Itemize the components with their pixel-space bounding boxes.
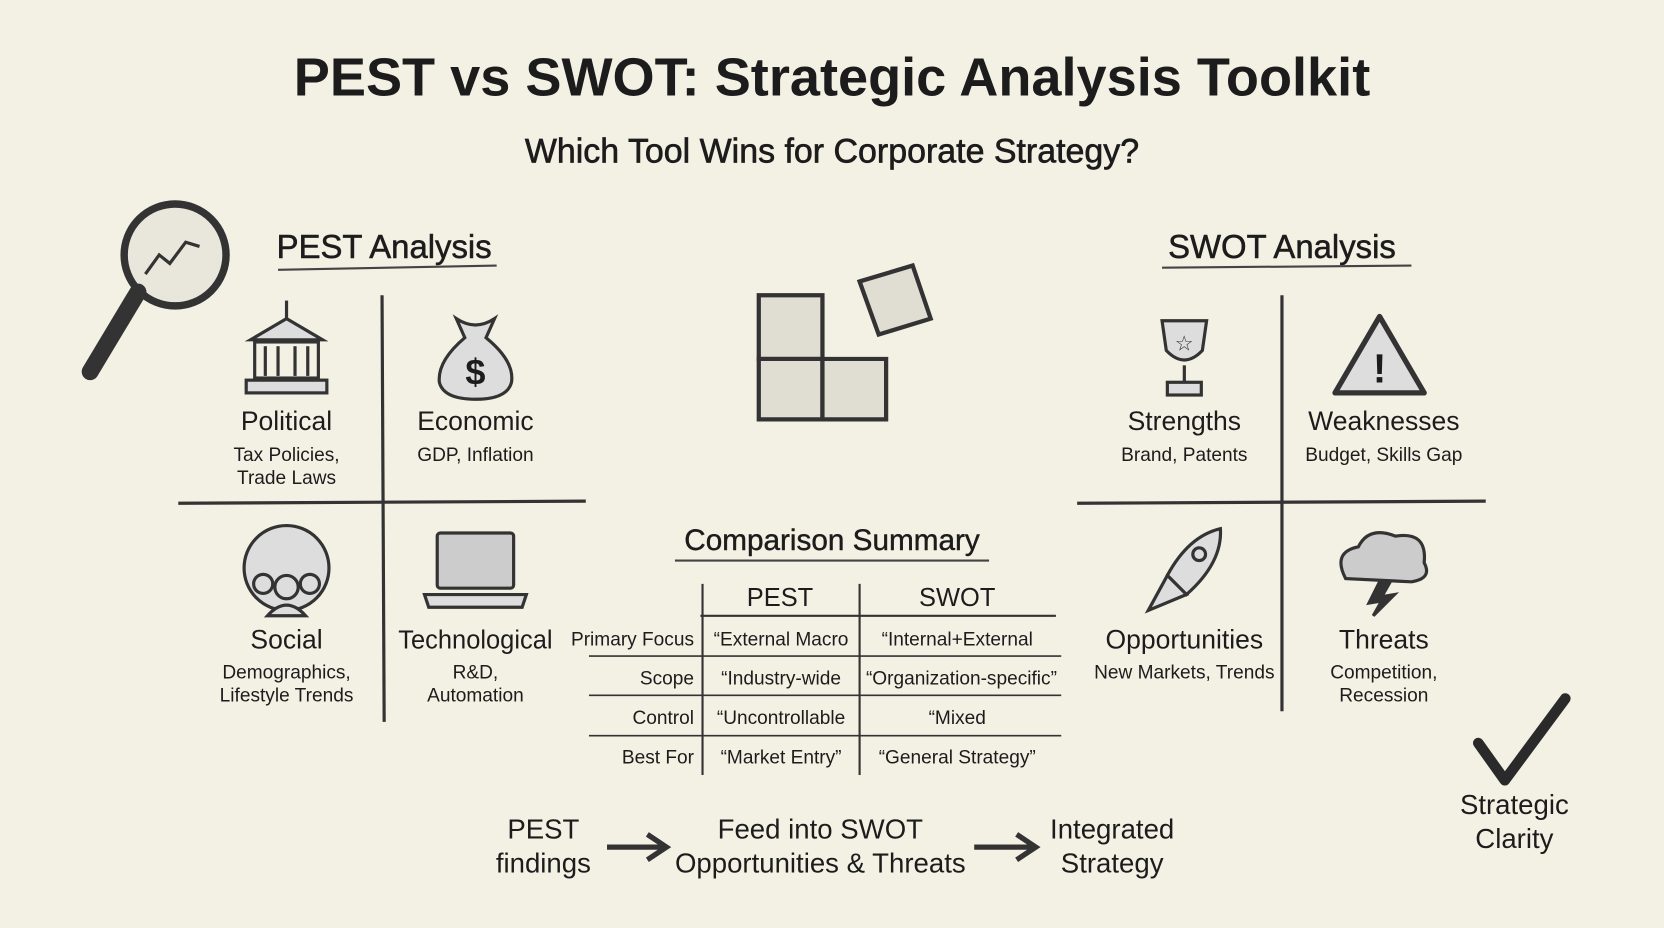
panel: SWOT grid: Brand, Patents bbox=[1121, 445, 1247, 466]
panel: PEST grid bbox=[178, 295, 586, 722]
panel: PEST grid: Demographics, bbox=[222, 662, 351, 683]
panel: PEST grid: Automation bbox=[427, 686, 524, 707]
panel: SWOT grid: Recession bbox=[1339, 686, 1428, 707]
flow: PEST findings: findings bbox=[496, 848, 591, 879]
panel: SWOT grid: New Markets, Trends bbox=[1094, 662, 1275, 683]
heading: SWOT Analysis: SWOT Analysis bbox=[1168, 228, 1396, 265]
panel: PEST grid: Tax Policies, bbox=[233, 445, 340, 466]
table: comparison: “Uncontrollable bbox=[717, 708, 845, 729]
table: comparison: “General Strategy” bbox=[879, 747, 1036, 768]
table: comparison: Primary Focus bbox=[571, 629, 694, 650]
text: Strategic Clarity bbox=[1460, 789, 1569, 854]
text: Strategic Clarity: Clarity bbox=[1475, 823, 1554, 854]
icon: money bag: $ bbox=[465, 351, 485, 392]
panel: SWOT grid: Opportunities bbox=[1105, 625, 1263, 655]
icon: warning triangle bbox=[1335, 316, 1424, 393]
panel: PEST grid: Technological bbox=[398, 627, 553, 655]
panel: SWOT grid: Competition, bbox=[1330, 662, 1437, 683]
icon: money bag bbox=[439, 319, 512, 399]
table: comparison: Control bbox=[632, 708, 694, 729]
icon: globe with people bbox=[244, 526, 329, 616]
panel: SWOT grid: Weaknesses bbox=[1308, 406, 1459, 436]
panel: SWOT grid: Strengths bbox=[1128, 406, 1241, 436]
panel: SWOT grid: Threats bbox=[1339, 625, 1429, 655]
arrow bbox=[607, 834, 666, 860]
panel: SWOT grid bbox=[1077, 295, 1486, 711]
table: comparison: SWOT bbox=[919, 584, 995, 612]
table: comparison: “Mixed bbox=[929, 708, 986, 729]
icon: magnifying glass bbox=[90, 204, 226, 372]
icon: government building bbox=[246, 301, 327, 393]
flow: PEST findings: Feed into SWOT bbox=[718, 814, 923, 845]
flow: PEST findings: Opportunities & Threats bbox=[675, 848, 966, 879]
flow: PEST findings bbox=[496, 814, 1174, 879]
table: comparison: Best For bbox=[622, 747, 695, 768]
heading: Comparison Summary: Comparison Summary bbox=[684, 524, 980, 557]
icon: warning triangle: ! bbox=[1373, 345, 1386, 391]
arrow bbox=[974, 834, 1036, 860]
panel: PEST grid: GDP, Inflation bbox=[417, 445, 534, 466]
table: comparison: “External Macro bbox=[714, 629, 848, 650]
flow: PEST findings: Strategy bbox=[1061, 848, 1164, 879]
flow: PEST findings: Integrated bbox=[1050, 814, 1174, 845]
icon: puzzle pieces bbox=[759, 266, 931, 419]
panel: SWOT grid: Budget, Skills Gap bbox=[1305, 445, 1462, 466]
table: comparison: “Internal+External bbox=[882, 629, 1033, 650]
table: comparison: “Industry-wide bbox=[721, 669, 841, 690]
panel: PEST grid: Trade Laws bbox=[237, 468, 336, 489]
panel: PEST grid: Lifestyle Trends bbox=[220, 686, 353, 707]
icon: storm cloud bbox=[1341, 533, 1427, 616]
subtitle: Which Tool Wins for Corporate Strategy? bbox=[525, 133, 1139, 171]
icon: checkmark bbox=[1478, 699, 1565, 780]
panel: PEST grid: Political bbox=[241, 406, 332, 436]
panel: PEST grid: R&D, bbox=[453, 662, 498, 683]
panel: PEST grid: Economic bbox=[417, 406, 534, 436]
table: comparison bbox=[571, 584, 1061, 775]
table: comparison: Scope bbox=[640, 669, 694, 690]
table: comparison: PEST bbox=[747, 584, 813, 612]
icon: laptop bbox=[424, 533, 526, 607]
icon: trophy bbox=[1162, 321, 1207, 395]
heading: PEST Analysis: PEST Analysis bbox=[277, 228, 492, 265]
text: Strategic Clarity: Strategic bbox=[1460, 789, 1569, 820]
title: PEST vs SWOT: Strategic Analysis Toolkit bbox=[294, 48, 1370, 108]
icon: trophy: ☆ bbox=[1175, 332, 1194, 355]
table: comparison: “Organization-specific” bbox=[866, 669, 1057, 690]
flow: PEST findings: PEST bbox=[507, 814, 580, 845]
panel: PEST grid: Social bbox=[250, 625, 323, 655]
icon: rocket bbox=[1148, 529, 1221, 610]
table: comparison: “Market Entry” bbox=[721, 747, 842, 768]
